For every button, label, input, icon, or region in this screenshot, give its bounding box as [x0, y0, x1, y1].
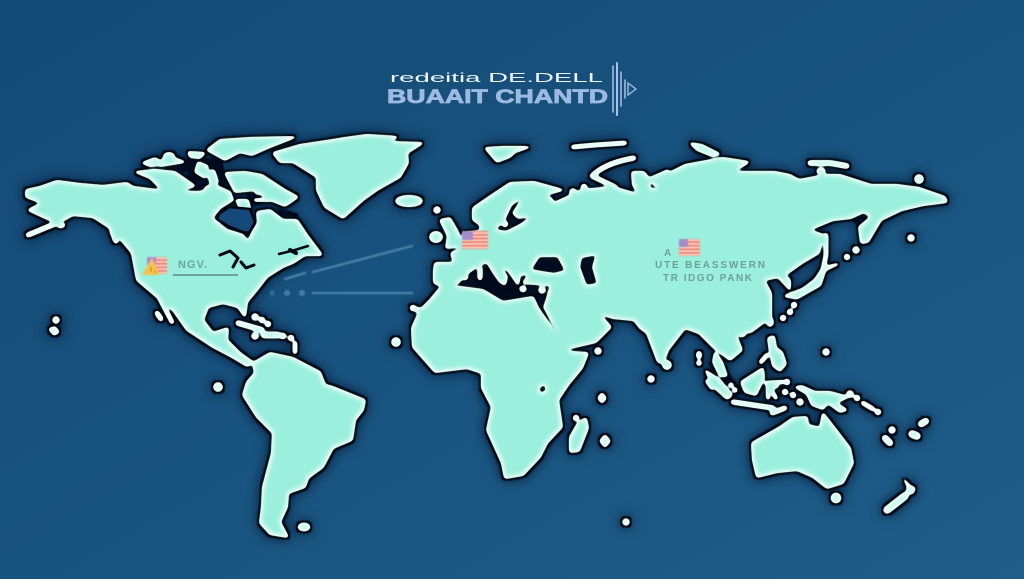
title line 1: redeitia DE.DELL [390, 70, 603, 85]
text: NGV: NGV. [178, 259, 207, 271]
New Guinea [795, 386, 848, 412]
Falkland and southern islands [298, 524, 310, 530]
Great Lakes and St Lawrence [220, 246, 308, 268]
icon: flag Europe [462, 231, 488, 249]
South America [243, 353, 365, 537]
Hudson Bay [217, 207, 255, 233]
Alaska peninsula strips [28, 223, 57, 235]
East Asia islands [648, 235, 914, 382]
Philippines [761, 336, 786, 371]
title line 2: BUAAIT CHANTD [387, 87, 608, 108]
New Zealand [887, 478, 915, 510]
Greenland [273, 135, 423, 218]
Madagascar [570, 418, 588, 452]
Pacific coast islands [112, 230, 116, 241]
text: UTE BEASSWERN: UTE BEASSWERN [655, 260, 765, 271]
world map land masses [26, 135, 947, 537]
icon: warning triangle [142, 258, 160, 275]
Arctic and European islands [396, 143, 923, 293]
African and Atlantic islands [49, 306, 629, 525]
text: TR IDGO PANK: TR IDGO PANK [663, 273, 753, 284]
underline [173, 274, 238, 276]
label: NGV with warning flag [142, 257, 238, 276]
Eurasia [434, 158, 947, 363]
Tasmania [832, 494, 840, 502]
icon: waveform [613, 63, 636, 115]
diagonal connector line [285, 246, 412, 279]
title [387, 63, 636, 115]
black inland seas and straits beneath the land [140, 158, 872, 400]
Indonesia and Malay peninsula [705, 352, 803, 413]
Africa [412, 287, 588, 478]
icon: flag Asia [679, 239, 700, 256]
Pacific islands [847, 391, 926, 443]
Canadian Arctic islands [135, 137, 325, 211]
Australia [752, 413, 853, 488]
Caribbean islands [238, 323, 262, 330]
icon: flag west [142, 257, 167, 275]
connector lines [270, 246, 412, 295]
text: A: A [664, 248, 671, 259]
label: Asia flag and text [655, 239, 765, 284]
horizontal connector line with dots [270, 291, 412, 295]
North America [26, 181, 322, 366]
